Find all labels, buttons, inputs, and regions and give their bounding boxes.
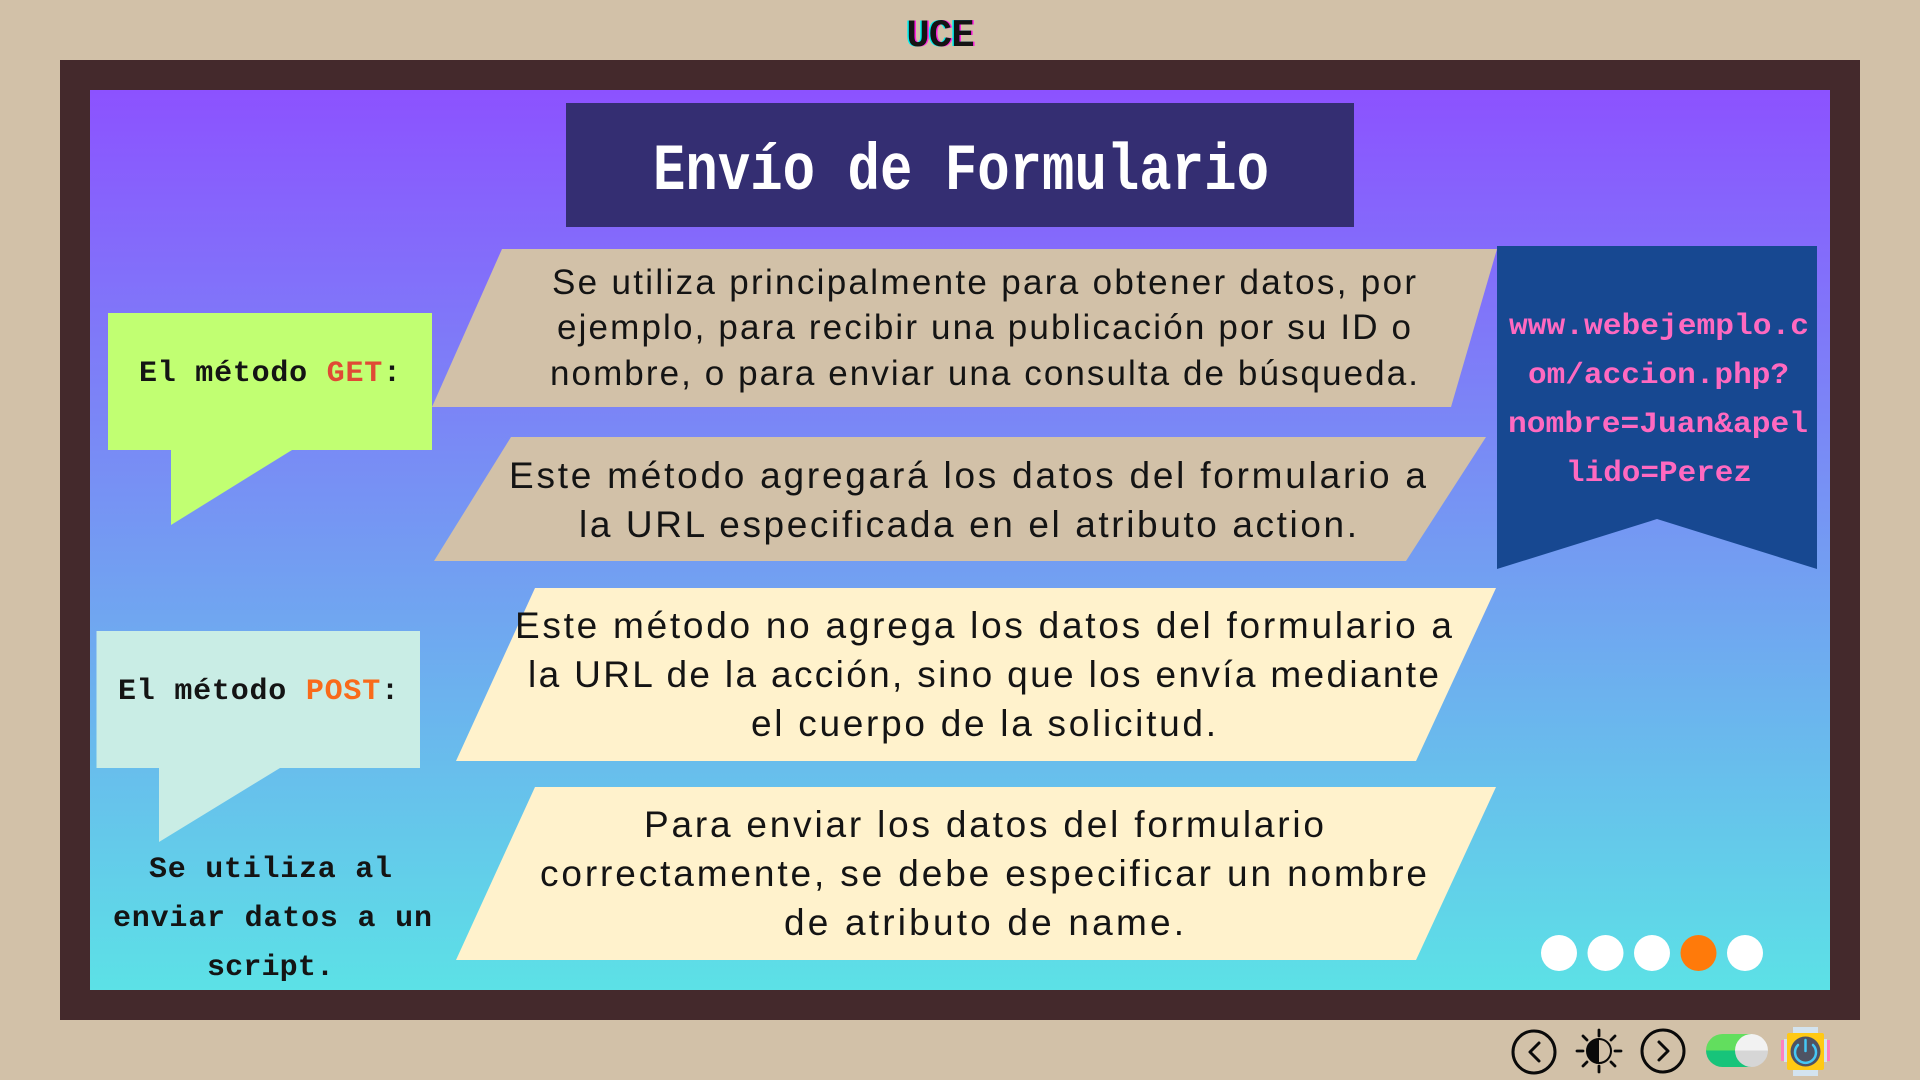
heading: UCE: UCE — [906, 14, 974, 58]
panel: POST description 1 — [456, 588, 1496, 761]
panel: GET description 1: Se utiliza principalmente para obtener datos, por — [552, 263, 1416, 302]
panel: GET description 1 — [432, 249, 1497, 407]
icon: brightness — [1577, 1030, 1621, 1072]
icon: previous arrow — [1513, 1031, 1555, 1073]
icon: toggle — [1706, 1034, 1768, 1067]
callout: POST method — [96, 631, 420, 842]
callout: POST method: El método POST: — [118, 675, 399, 709]
callout: GET method: El método GET: — [139, 357, 401, 391]
panel: GET description 1: ejemplo, para recibir una publicación por su ID o — [557, 308, 1411, 347]
panel: POST description 1: la URL de la acción, sino que los envía mediante — [528, 654, 1439, 695]
panel: URL example ribbon: www.webejemplo.c — [1509, 310, 1809, 344]
panel: POST description 2 — [456, 787, 1496, 960]
callout: GET method — [108, 313, 432, 525]
panel: URL example ribbon: om/accion.php? — [1528, 359, 1789, 393]
text: POST usage: Se utiliza al — [149, 853, 392, 887]
pagination dots — [1541, 935, 1763, 971]
panel: GET description 2: Este método agregará los datos del formulario a — [509, 455, 1426, 496]
panel: POST description 2: Para enviar los datos del formulario — [644, 804, 1324, 845]
panel: POST description 1: el cuerpo de la solicitud. — [751, 703, 1216, 744]
text: POST usage: script. — [207, 951, 334, 985]
panel: GET description 2: la URL especificada en el atributo action. — [579, 504, 1357, 545]
title — [566, 103, 1354, 227]
panel: URL example ribbon: lido=Perez — [1566, 457, 1752, 491]
panel: POST description 2: correctamente, se debe especificar un nombre — [540, 853, 1427, 894]
icon: power button — [1781, 1027, 1830, 1076]
panel: GET description 2 — [434, 437, 1486, 561]
title: Envío de Formulario — [653, 134, 1269, 209]
text: POST usage — [113, 853, 432, 985]
panel: URL example ribbon — [1497, 246, 1817, 569]
panel: GET description 1: nombre, o para enviar una consulta de búsqueda. — [550, 354, 1418, 393]
panel: URL example ribbon: nombre=Juan&apel — [1508, 408, 1808, 442]
panel: POST description 1: Este método no agrega los datos del formulario a — [515, 605, 1452, 646]
icon: next arrow — [1642, 1030, 1684, 1072]
panel: POST description 2: de atributo de name. — [784, 902, 1184, 943]
text: POST usage: enviar datos a un — [113, 902, 432, 936]
